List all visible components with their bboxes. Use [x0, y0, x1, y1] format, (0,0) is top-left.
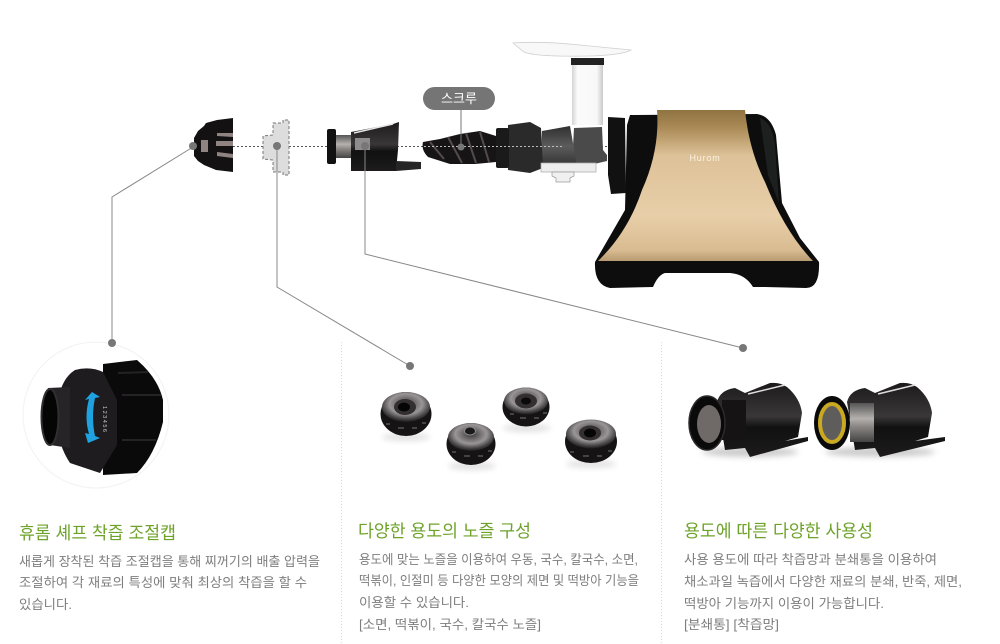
body — [359, 552, 639, 632]
body: [소면, 떡볶이, 국수, 칼국수 노즐] — [359, 617, 541, 632]
chrome foot — [541, 163, 596, 172]
nozzle 2 — [446, 423, 496, 465]
text column: cap — [19, 523, 320, 612]
body: 있습니다. — [19, 597, 72, 612]
photo: bowl and strainer — [689, 383, 945, 457]
body: 용도에 맞는 노즐을 이용하여 우동, 국수, 칼국수, 소면, — [359, 552, 638, 567]
juicer rear highlight — [760, 118, 779, 203]
body — [19, 554, 320, 612]
hopper collar — [571, 58, 604, 65]
chamber neck — [496, 128, 509, 168]
hopper tray — [513, 42, 631, 56]
text column: nozzles — [358, 521, 639, 632]
nozzle 3 — [502, 388, 550, 426]
column dividers — [340, 342, 342, 644]
label pill: screw — [423, 87, 495, 110]
screw leader line — [460, 110, 462, 146]
heading: 다양한 용도의 노즐 구성 — [358, 521, 531, 541]
marker dots — [108, 142, 747, 370]
text column: bowl — [684, 521, 962, 632]
blue adjustment arrow — [85, 392, 100, 443]
gold front panel — [598, 110, 813, 261]
body — [684, 552, 962, 632]
part: adjustment cap — [194, 118, 233, 172]
juicer main body — [595, 110, 819, 288]
photo: adjustment cap close-up — [23, 342, 169, 488]
body: 떡방아 기능까지 이용이 가능합니다. — [684, 596, 884, 611]
body: 채소과일 녹즙에서 다양한 재료의 분쇄, 반죽, 제면, — [684, 574, 962, 589]
chamber ring — [508, 122, 543, 173]
nozzle 1 — [380, 392, 432, 436]
adjuster knob — [103, 360, 163, 475]
light dashed line over the screw — [424, 146, 562, 148]
body: [분쇄통] [착즙망] — [684, 617, 779, 632]
screw auger — [423, 131, 496, 164]
heading: 용도에 따른 다양한 사용성 — [684, 521, 873, 541]
strainer — [814, 383, 945, 457]
black front dial — [608, 117, 626, 194]
leader line: nozzle — [277, 146, 410, 366]
leader line: bowl — [365, 146, 743, 348]
juicing chamber — [496, 122, 607, 182]
body: 새롭게 장착된 착즙 조절캡을 통해 찌꺼기의 배출 압력을 — [19, 554, 320, 569]
chamber cone — [541, 126, 577, 166]
screw marker dot — [458, 144, 464, 150]
glass chute — [572, 65, 603, 125]
part: strainer and bowl — [327, 122, 421, 171]
part: nozzle placeholder — [263, 120, 289, 175]
juicer rear black housing — [595, 114, 819, 288]
chamber drive collar — [572, 127, 607, 165]
body: 이용할 수 있습니다. — [359, 595, 469, 610]
grinding bowl — [689, 383, 808, 457]
chrome outlet — [552, 172, 574, 182]
dashed axis line — [233, 146, 612, 148]
dial scale: 1 2 3 4 5 6 — [101, 406, 107, 432]
photo: four nozzles — [380, 388, 617, 470]
body: 사용 용도에 따라 착즙망과 분쇄통을 이용하여 — [684, 552, 937, 567]
lens tube — [48, 387, 70, 448]
leader line: cap — [112, 147, 193, 342]
body: 떡볶이, 인절미 등 다양한 모양의 제면 및 떡방아 기능을 — [359, 573, 639, 588]
body: 조절하여 각 재료의 특성에 맞춰 최상의 착즙을 할 수 — [19, 575, 307, 590]
label pill: screw: 스크루 — [441, 91, 477, 106]
nozzle 4 — [565, 420, 617, 463]
brand logo: Hurom — [689, 153, 721, 163]
glass hopper and chute — [513, 42, 631, 125]
dial ring — [58, 368, 117, 473]
heading: 휴롬 셰프 착즙 조절캡 — [19, 523, 176, 543]
